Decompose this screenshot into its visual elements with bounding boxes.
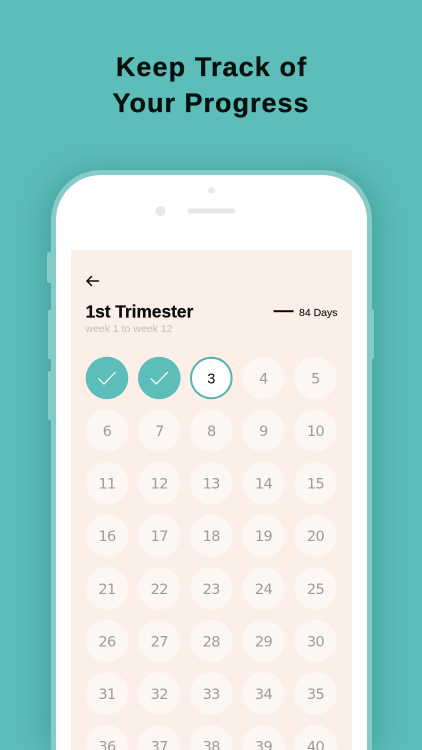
day grid: 9 <box>259 424 268 440</box>
day grid: 21 <box>98 582 116 598</box>
day grid: 26 <box>98 634 116 650</box>
completed day 2 <box>138 357 181 399</box>
day grid: 24 <box>255 582 272 598</box>
front camera <box>156 206 166 216</box>
day grid: 14 <box>255 477 272 493</box>
day grid: 8 <box>207 424 216 440</box>
panel: trimester tracker <box>71 250 352 750</box>
day grid: 31 <box>98 687 116 703</box>
subheading: week 1 to week 12 <box>84 323 173 335</box>
day grid: 7 <box>155 424 164 440</box>
day grid: 5 <box>311 372 320 388</box>
day grid: 12 <box>151 477 168 493</box>
current day 3: 3 <box>207 372 215 388</box>
day grid: 6 <box>103 424 112 440</box>
day grid: 19 <box>255 529 272 545</box>
day grid: 13 <box>203 477 220 493</box>
day grid: 20 <box>307 529 324 545</box>
day grid: 29 <box>255 634 272 650</box>
day grid: 23 <box>203 582 220 598</box>
day grid <box>86 357 337 750</box>
day grid: 17 <box>151 529 168 545</box>
icon: back arrow <box>87 276 98 286</box>
day grid: 34 <box>255 687 272 703</box>
day grid: 15 <box>307 477 324 493</box>
day grid: 27 <box>151 634 168 650</box>
day grid: 18 <box>203 529 220 545</box>
day grid: 30 <box>307 634 324 650</box>
side buttons <box>47 252 374 420</box>
sensor dot <box>208 187 215 194</box>
duration label: 84 Days <box>299 307 338 319</box>
title <box>112 52 310 118</box>
day grid: 25 <box>307 582 324 598</box>
day grid: 4 <box>259 372 268 388</box>
day grid: 16 <box>98 529 116 545</box>
day grid: 10 <box>307 424 324 440</box>
day grid: 35 <box>307 687 324 703</box>
day grid: 32 <box>151 687 168 703</box>
day grid: 11 <box>98 477 116 493</box>
speaker <box>188 208 236 214</box>
duration label <box>274 307 338 319</box>
phone bezel <box>51 170 372 750</box>
completed day 1 <box>86 357 128 399</box>
day grid: 28 <box>203 634 220 650</box>
current day 3 <box>191 358 232 398</box>
day grid: 22 <box>151 582 168 598</box>
title: Your Progress <box>112 88 310 118</box>
day grid: 33 <box>203 687 220 703</box>
title: Keep Track of <box>116 52 307 82</box>
heading: 1st Trimester <box>86 302 193 322</box>
phone mockup <box>42 168 381 750</box>
phone screen <box>56 175 367 750</box>
